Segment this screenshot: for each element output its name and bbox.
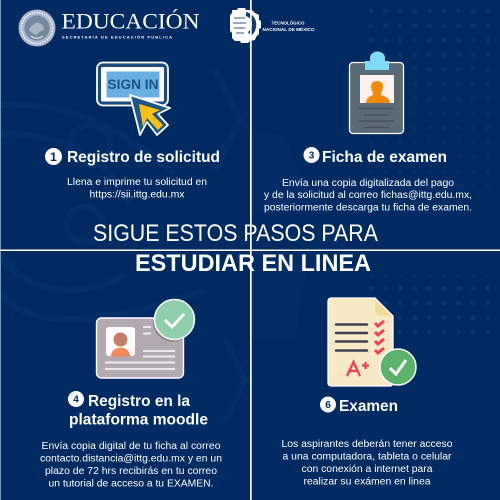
title: ESTUDIAR EN LINEA <box>135 250 371 277</box>
description: Envía copia digital de tu ficha al correo <box>42 441 221 452</box>
description: y de la solicitud al correo fichas@ittg.edu.mx, <box>264 190 472 201</box>
icon: ID card with check <box>96 300 194 378</box>
heading: Registro de solicitud <box>67 149 220 166</box>
step number 6 <box>320 396 336 412</box>
description: contacto.distancia@ittg.edu.mx y en un <box>40 454 222 464</box>
heading: Registro en la <box>88 393 190 410</box>
description <box>40 441 222 490</box>
step number 3 <box>304 147 320 163</box>
title <box>93 220 378 277</box>
step number 3: 3 <box>309 150 315 162</box>
description: Llena e imprime tu solicitud en <box>67 177 207 188</box>
description: un tutorial de acceso a tu EXAMEN. <box>48 478 214 490</box>
subtitle: SECRETARÍA DE EDUCACIÓN PÚBLICA <box>62 34 172 40</box>
icon: sign in button with cursor <box>97 62 170 135</box>
icon: graded exam document <box>328 298 416 386</box>
icon: ID badge <box>350 52 404 134</box>
step number 6: 6 <box>325 400 331 411</box>
panel: step 4 <box>40 300 222 490</box>
description: https://sii.ittg.edu.mx <box>90 190 185 200</box>
description: realizar su exámen en linea <box>304 476 431 488</box>
heading: Ficha de examen <box>322 149 447 166</box>
logo: Tecnológico Nacional de México <box>230 8 315 43</box>
icon: sign in button with cursor: SIGN IN <box>108 76 158 92</box>
description: con conexión a internet para <box>302 464 433 475</box>
step number 4 <box>68 391 84 407</box>
heading <box>69 393 208 428</box>
description: posteriormente descarga tu ficha de examen. <box>264 202 472 214</box>
wordmark line 1: TECNOLÓGICO <box>272 20 305 25</box>
heading: plataforma moodle <box>69 412 208 428</box>
panel: step 1 <box>45 62 220 200</box>
description: Envía una copia digitalizada del pago <box>282 178 455 189</box>
icon: national seal <box>18 10 56 46</box>
panel: step 6 <box>282 298 453 488</box>
description: a una computadora, tableta o celular <box>282 452 452 462</box>
description <box>264 178 472 214</box>
description <box>282 439 453 488</box>
description: plazo de 72 hrs recibirás en tu correo <box>45 466 218 477</box>
heading: Examen <box>339 398 398 415</box>
title: SIGUE ESTOS PASOS PARA <box>93 220 378 247</box>
step number 4: 4 <box>73 394 79 406</box>
panel: step 3 <box>264 52 472 214</box>
step number 1 <box>45 148 62 165</box>
description: Los aspirantes deberán tener acceso <box>282 439 453 450</box>
step number 1: 1 <box>50 150 57 164</box>
wordmark: EDUCACIÓN <box>62 8 200 34</box>
logo: Educación <box>18 8 200 46</box>
description <box>67 177 207 200</box>
wordmark line 2: NACIONAL DE MÉXICO <box>262 27 315 32</box>
icon: gear emblem <box>230 8 261 43</box>
